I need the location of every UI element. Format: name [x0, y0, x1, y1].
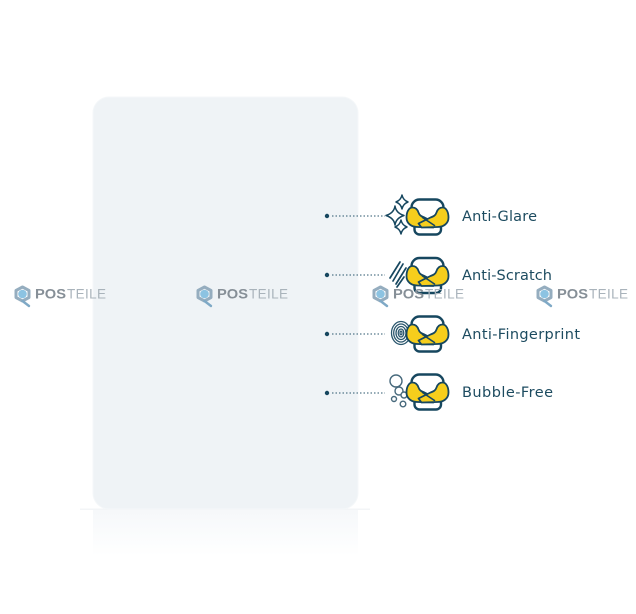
icon: bubbles with armchair: [390, 374, 448, 410]
leader line: Anti-Fingerprint: [325, 332, 385, 336]
watermark 1: TEILE: [67, 286, 106, 302]
label: Anti-Fingerprint: Anti-Fingerprint: [462, 327, 580, 343]
watermark 1: POS: [35, 286, 66, 302]
watermark 4: POS: [557, 286, 588, 302]
label: Anti-Scratch: Anti-Scratch: [462, 268, 552, 284]
icon: sparkles with armchair: [386, 195, 448, 234]
watermark 2: TEILE: [249, 286, 288, 302]
leader line: Bubble-Free: [325, 391, 385, 395]
device reflection: [80, 508, 370, 556]
feature: Anti-Fingerprint: [325, 316, 580, 352]
watermark 2: POS: [217, 286, 248, 302]
feature: Anti-Scratch: [325, 258, 552, 293]
panel: screen protector card: [93, 97, 358, 509]
watermark 3: TEILE: [425, 286, 464, 302]
icon: fingerprint with armchair: [392, 316, 448, 352]
watermark 3: POS: [393, 286, 424, 302]
leader line: Anti-Scratch: [325, 273, 385, 277]
feature: Anti-Glare: [325, 195, 537, 234]
feature: Bubble-Free: [325, 374, 553, 410]
label: Bubble-Free: Bubble-Free: [462, 385, 553, 401]
label: Anti-Glare: Anti-Glare: [462, 209, 537, 225]
watermark 2: [198, 286, 288, 306]
watermark 4: TEILE: [589, 286, 628, 302]
leader line: Anti-Glare: [325, 214, 385, 218]
watermark 4: [538, 286, 628, 306]
watermark 3: [374, 286, 464, 306]
icon: scratches with armchair: [390, 258, 448, 293]
watermark 1: [16, 286, 106, 306]
